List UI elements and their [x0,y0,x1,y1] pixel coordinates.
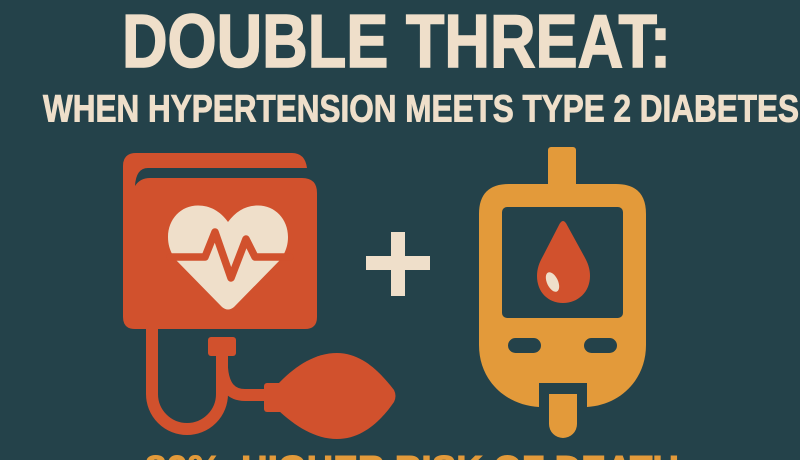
title: DOUBLE THREAT: [122,0,671,83]
test strip slot [539,383,587,408]
test strip [549,394,577,438]
heartbeat line [170,232,290,278]
tube connector [208,337,236,356]
meter body [479,184,646,407]
bulb [278,353,396,439]
blood drop [537,221,590,303]
tube [152,329,270,429]
screen [502,207,623,318]
icon: blood pressure monitor [123,153,396,439]
icon: glucose meter [479,147,646,438]
right button [584,338,617,353]
icon: plus sign [366,232,430,296]
cuff body [123,153,317,329]
heart [168,206,288,310]
drop highlight [543,270,562,294]
bulb neck [264,383,286,412]
left button [508,338,541,353]
top nub [548,147,576,192]
